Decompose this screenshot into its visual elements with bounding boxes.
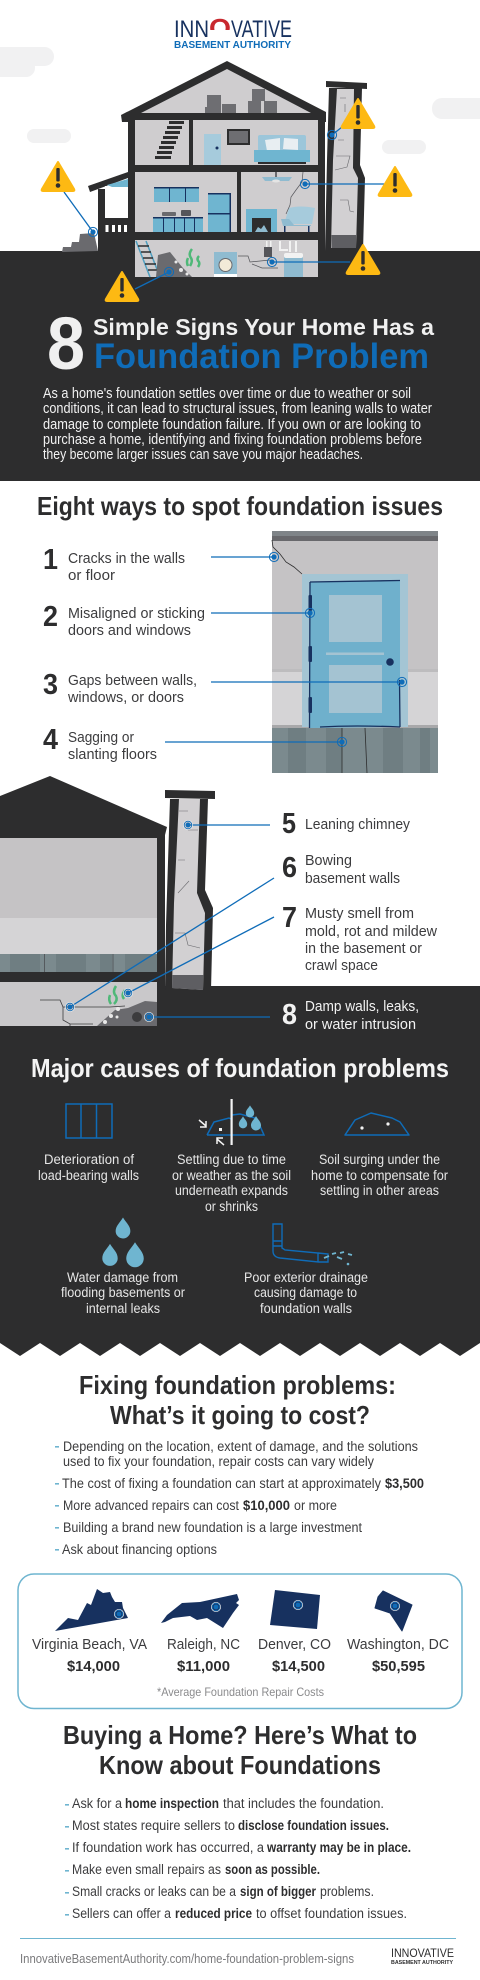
intro paragraph xyxy=(43,386,432,463)
cause: load-bearing walls: load-bearing walls xyxy=(38,1168,139,1183)
warning: wall crack xyxy=(300,167,411,196)
icon: settling soil xyxy=(199,1099,264,1145)
map: Virginia xyxy=(32,1589,147,1675)
logo: Innovative Basement Authority xyxy=(174,18,292,48)
chimney xyxy=(325,81,367,251)
buying bullet list: problems. xyxy=(320,1884,374,1899)
footnote: *Average Foundation Repair Costs xyxy=(157,1685,324,1699)
buying bullet list: disclose foundation issues. xyxy=(238,1818,389,1833)
footer logo: BASEMENT AUTHORITY xyxy=(391,1960,453,1966)
armchair xyxy=(281,206,315,232)
sign 7: mold, rot and mildew xyxy=(305,924,438,940)
logo: Innovative Basement Authority: BASEMENT AUTHORITY xyxy=(174,40,291,51)
sign 1: or floor xyxy=(68,568,115,584)
cost bullet list: Ask about financing options xyxy=(62,1542,217,1557)
porch xyxy=(62,172,130,253)
attic with boxes xyxy=(141,69,311,113)
sign 8: Damp walls, leaks, xyxy=(305,999,419,1015)
cost bullet list: Building a brand new foundation is a large investment xyxy=(63,1520,362,1535)
cost bullet list xyxy=(55,1439,424,1557)
roof xyxy=(121,61,326,122)
cost bullet list: $3,500 xyxy=(385,1476,424,1491)
sign 3: 3 xyxy=(43,669,58,701)
cause: soil surging: settling in other areas xyxy=(320,1183,439,1198)
warning: basement wall xyxy=(267,245,379,274)
interior wall xyxy=(0,838,157,972)
map: Washington DC: $50,595 xyxy=(372,1658,425,1675)
icon: wall panels xyxy=(66,1104,112,1138)
basement room xyxy=(0,982,157,1026)
map: North Carolina: $11,000 xyxy=(177,1658,230,1675)
sign 5 xyxy=(183,808,411,840)
title: 8 xyxy=(47,302,85,385)
sign 6: basement walls xyxy=(305,871,400,887)
map: Virginia: Virginia Beach, VA xyxy=(32,1636,147,1653)
cause: load-bearing walls xyxy=(38,1104,139,1183)
buying bullet list: If foundation work has occurred, a xyxy=(72,1840,264,1855)
cost bullet list: $10,000 xyxy=(243,1498,290,1513)
warning: basement rubble xyxy=(106,267,174,301)
map: Washington DC xyxy=(347,1591,449,1675)
intro paragraph: purchase a home, identifying and fixing foundation problems before xyxy=(43,432,422,448)
logo: Innovative Basement Authority: INN xyxy=(174,16,209,43)
sign 3: Gaps between walls, xyxy=(68,673,197,689)
buying bullet list: Small cracks or leaks can be a xyxy=(72,1884,236,1899)
sign 3: windows, or doors xyxy=(67,690,184,706)
intro paragraph: they become larger issues can save you major headaches. xyxy=(43,447,363,463)
sign 6 xyxy=(65,852,400,1012)
chimney xyxy=(165,790,215,990)
heading: cost xyxy=(79,1370,396,1430)
cause: poor drainage xyxy=(244,1224,368,1316)
heading: major causes: Major causes of foundation problems xyxy=(31,1053,449,1083)
sign 4: 4 xyxy=(43,724,58,756)
cause: soil surging xyxy=(311,1113,448,1198)
sign 2: doors and windows xyxy=(68,623,191,639)
title: Simple Signs Your Home Has a xyxy=(93,314,435,340)
door frame xyxy=(302,574,408,727)
logo: Innovative Basement Authority: VATIVE xyxy=(231,16,292,43)
sign 8: 8 xyxy=(282,999,297,1031)
upper rooms xyxy=(135,120,318,165)
cost bullet list: used to fix your foundation, repair costs can vary widely xyxy=(63,1454,374,1469)
sign 7 xyxy=(123,902,438,998)
heading: buying a home: Buying a Home? Here’s What to xyxy=(63,1720,417,1750)
clouds xyxy=(0,47,480,154)
sign 4: Sagging or xyxy=(68,730,134,746)
map: Washington DC: Washington, DC xyxy=(347,1636,449,1653)
basement xyxy=(135,240,318,277)
bedroom door xyxy=(204,134,221,165)
cost bullet list: The cost of fixing a foundation can start at approximately xyxy=(62,1476,381,1491)
buying bullet list: Sellers can offer a xyxy=(72,1906,171,1921)
sign 6: Bowing xyxy=(305,853,352,869)
logo: Innovative Basement Authority: O xyxy=(209,13,231,43)
buying bullet list: to offset foundation issues. xyxy=(256,1906,407,1921)
fireplace xyxy=(246,209,277,232)
map: Virginia: $14,000 xyxy=(67,1658,120,1675)
cause: settling: Settling due to time xyxy=(177,1152,286,1167)
illustration: house cutaway xyxy=(62,61,367,277)
cause: water damage: flooding basements or xyxy=(61,1285,185,1300)
cause: soil surging: Soil surging under the xyxy=(319,1152,440,1167)
buying bullet list: sign of bigger xyxy=(240,1884,317,1899)
illustration: house side view xyxy=(0,776,215,1026)
buying bullet list: warranty may be in place. xyxy=(266,1840,411,1855)
sign 2: 2 xyxy=(43,601,58,633)
wall crack xyxy=(286,172,303,214)
buying bullet list: Most states require sellers to xyxy=(72,1818,235,1833)
header background xyxy=(0,251,480,481)
house silhouette xyxy=(0,776,167,990)
icon: water drops xyxy=(102,1217,144,1267)
sign 7: in the basement or xyxy=(305,941,422,957)
footer logo xyxy=(391,1946,454,1966)
cause: settling: underneath expands xyxy=(175,1183,288,1198)
cause: settling: or weather as the soil xyxy=(172,1168,291,1183)
map: Colorado xyxy=(258,1590,331,1675)
cause: load-bearing walls: Deterioration of xyxy=(44,1152,134,1167)
sign 2 xyxy=(43,601,315,639)
buying bullet list: that includes the foundation. xyxy=(223,1796,384,1811)
warning: steps xyxy=(42,162,98,237)
map: Colorado: $14,500 xyxy=(272,1658,325,1675)
washer xyxy=(214,252,237,277)
kitchen cabinets xyxy=(153,187,231,232)
intro paragraph: conditions, it can lead to structural issues, from leaning walls to water xyxy=(43,401,432,417)
sign 1 xyxy=(43,544,279,584)
cause: poor drainage: causing damage to xyxy=(254,1285,357,1300)
attic stairs xyxy=(155,121,184,159)
sign 6: 6 xyxy=(282,852,297,884)
sign 1: Cracks in the walls xyxy=(68,551,185,567)
sign 4: slanting floors xyxy=(68,747,157,763)
cost bullet list: or more xyxy=(294,1498,337,1513)
cracks xyxy=(272,540,367,773)
heading: buying a home: Know about Foundations xyxy=(99,1750,381,1780)
mold wisps xyxy=(187,249,199,267)
water heater xyxy=(264,241,303,277)
cause: water damage: Water damage from xyxy=(67,1270,178,1285)
heading: buying a home xyxy=(63,1720,417,1780)
sign 4 xyxy=(43,724,347,763)
warning: chimney xyxy=(327,99,374,140)
heading: cost: What’s it going to cost? xyxy=(110,1400,370,1430)
map: Colorado: Denver, CO xyxy=(258,1636,331,1653)
heading: cost: Fixing foundation problems: xyxy=(79,1370,396,1400)
buying bullet list: soon as possible. xyxy=(225,1862,320,1877)
footer logo: INNOVATIVE xyxy=(391,1946,454,1960)
footer rule xyxy=(20,1938,456,1939)
map: North Carolina: Raleigh, NC xyxy=(167,1636,240,1653)
cause: poor drainage: foundation walls xyxy=(260,1301,352,1316)
dark causes section background xyxy=(0,986,480,1356)
sign 8: or water intrusion xyxy=(305,1017,416,1033)
house body xyxy=(128,113,325,253)
sign 5: Leaning chimney xyxy=(305,817,411,833)
rubble xyxy=(156,252,192,277)
door xyxy=(308,580,400,728)
buying bullet list: reduced price xyxy=(175,1906,252,1921)
tv xyxy=(227,129,250,145)
sign 7: 7 xyxy=(282,902,297,934)
sign 1: 1 xyxy=(43,544,58,576)
sign 7: Musty smell from xyxy=(305,906,414,922)
buying bullet list: Ask for a xyxy=(72,1796,122,1811)
intro paragraph: As a home's foundation settles over time or due to weather or soil xyxy=(43,386,411,402)
buying bullet list xyxy=(65,1796,411,1921)
title xyxy=(47,302,435,385)
sign 7: crawl space xyxy=(305,958,378,974)
cause: soil surging: home to compensate for xyxy=(311,1168,448,1183)
map: North Carolina xyxy=(161,1594,240,1675)
title: Foundation Problem xyxy=(94,337,429,376)
sign 8 xyxy=(144,999,419,1033)
cause: poor drainage: Poor exterior drainage xyxy=(244,1270,368,1285)
cause: settling: or shrinks xyxy=(205,1199,258,1214)
cause: water damage: internal leaks xyxy=(86,1301,160,1316)
cause: water damage xyxy=(61,1217,185,1316)
buying bullet list: Make even small repairs as xyxy=(72,1862,221,1877)
panel: average repair costs xyxy=(18,1574,462,1708)
sign 5: 5 xyxy=(282,808,296,840)
sign 2: Misaligned or sticking xyxy=(68,606,205,622)
illustration: door with foundation damage xyxy=(272,531,438,773)
buying bullet list: home inspection xyxy=(125,1796,219,1811)
middle rooms xyxy=(135,172,318,232)
bed xyxy=(254,135,310,164)
cost bullet list: More advanced repairs can cost xyxy=(63,1498,239,1513)
basement stairs xyxy=(136,241,160,277)
sign 3 xyxy=(43,669,407,706)
icon: downspout xyxy=(273,1224,352,1265)
icon: surging soil xyxy=(345,1113,409,1135)
floor crack xyxy=(238,256,278,268)
intro paragraph: damage to complete foundation failure. If you own or are looking to xyxy=(43,417,421,433)
cause: settling xyxy=(172,1099,291,1214)
cost bullet list: Depending on the location, extent of damage, and the solutions xyxy=(63,1439,418,1454)
ceiling fan xyxy=(262,172,292,182)
footer url: InnovativeBasementAuthority.com/home-foundation-problem-signs xyxy=(20,1951,354,1966)
